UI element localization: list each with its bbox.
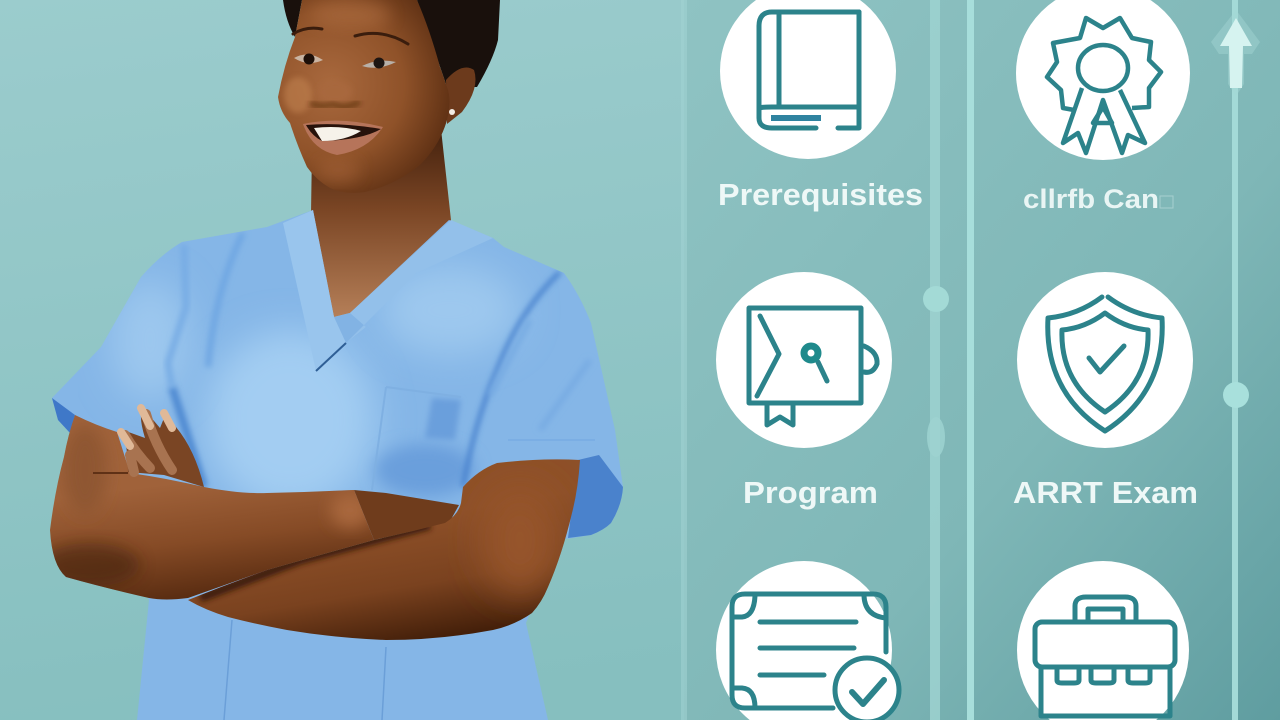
mouth <box>306 124 381 141</box>
step: program <box>716 272 892 510</box>
left shoulder fold <box>208 233 243 367</box>
icon: briefcase <box>1017 561 1189 720</box>
eyebrows <box>293 28 408 44</box>
sleeve seam right <box>463 272 560 487</box>
pocket edge <box>376 386 394 454</box>
divider line: centre <box>967 0 974 720</box>
sleeve inner dark right <box>568 455 623 538</box>
icon: award ribbon <box>1016 0 1190 160</box>
step: ARRT exam <box>1013 272 1198 510</box>
scrub top <box>40 200 640 720</box>
face <box>278 0 450 190</box>
timeline line: left <box>923 0 949 720</box>
hand <box>121 408 204 487</box>
sleeve inner dark left <box>52 398 75 433</box>
label: ARRT Exam: ARRT Exam <box>1013 475 1198 510</box>
photo: smiling nurse in blue scrubs <box>40 0 640 720</box>
shoulder highlight <box>380 265 520 355</box>
nose <box>318 81 352 103</box>
step: certification <box>1016 0 1190 214</box>
sleeve fold strokes <box>490 320 590 430</box>
lower arm top shade <box>200 525 430 598</box>
under-chest shadow <box>375 444 475 496</box>
forearm: upper <box>50 415 374 600</box>
hair <box>283 0 500 87</box>
lips <box>303 121 383 155</box>
wrist bone light <box>330 492 370 528</box>
earring <box>449 109 455 115</box>
ear <box>446 68 476 124</box>
scrub seams <box>224 620 386 720</box>
elbow shadow <box>40 543 140 587</box>
icon: program binder <box>716 272 892 448</box>
cheek highlight <box>284 77 312 113</box>
timeline line: right with arrow <box>1211 0 1260 720</box>
inner v-neck <box>334 313 366 343</box>
icon: certificate with check <box>716 561 899 720</box>
faint label trailing mark <box>1160 196 1173 208</box>
chin highlight <box>318 162 358 186</box>
left shoulder highlight <box>110 280 190 400</box>
step: career <box>1017 561 1189 720</box>
forehead highlight <box>310 1 390 29</box>
step: certificate <box>716 561 899 720</box>
right collar band <box>346 220 493 343</box>
collar band <box>283 210 346 371</box>
fingers <box>125 414 172 472</box>
body side shadow <box>172 387 204 487</box>
nose base shadow <box>310 102 360 107</box>
sleeve seam left <box>168 245 186 387</box>
eyes <box>294 54 396 68</box>
sleeve hem stitch <box>508 440 595 441</box>
icon: shield with check <box>1017 272 1193 448</box>
label: Program: Program <box>743 475 878 510</box>
lower arm elbow highlight <box>480 485 560 595</box>
teeth <box>314 127 361 141</box>
label: Prerequisites: Prerequisites <box>718 177 923 212</box>
step: prerequisites <box>718 0 923 212</box>
finger tips <box>121 408 172 446</box>
label: garbled certification text: cllrfb Can <box>1023 184 1159 214</box>
collar hem line <box>316 343 346 371</box>
chest highlight <box>205 330 375 510</box>
icon: book <box>720 0 896 159</box>
neck <box>311 120 451 317</box>
pocket shadow <box>425 398 461 440</box>
wrist crease <box>93 472 128 474</box>
forearm: lower <box>180 455 590 645</box>
back elbow segment <box>354 490 459 540</box>
panel: career steps <box>681 0 1280 720</box>
upper arm light <box>63 425 107 515</box>
